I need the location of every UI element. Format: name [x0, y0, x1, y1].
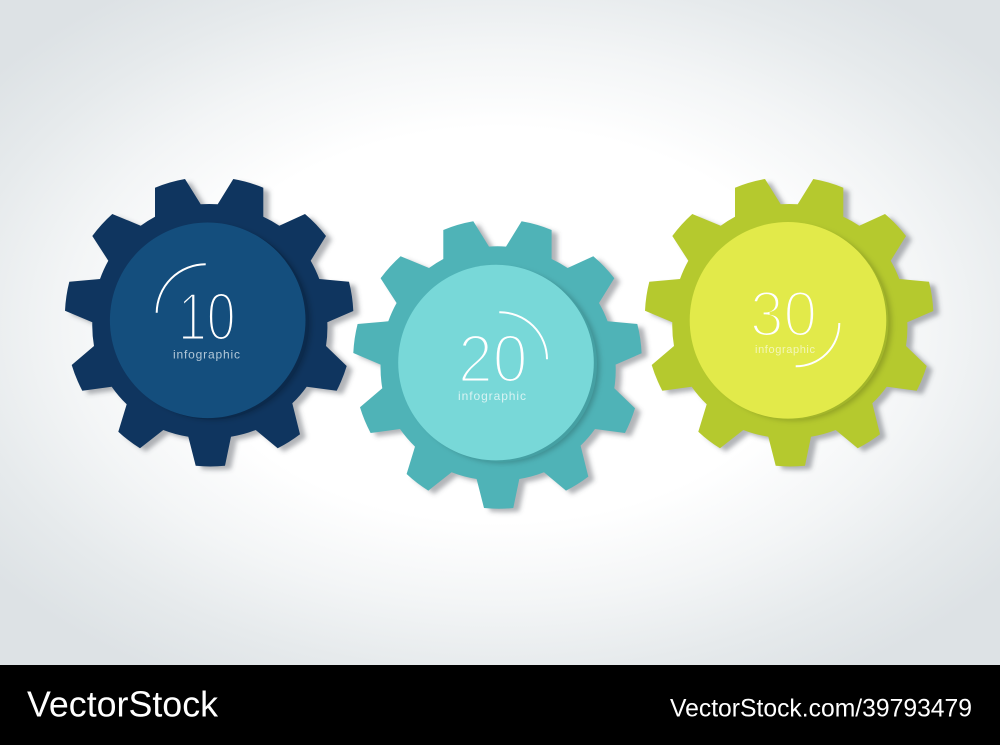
gear 2 soft disc shadow	[406, 269, 600, 463]
gear 3 drop shadow	[651, 182, 939, 470]
gear 3 disc	[690, 222, 886, 419]
gear 3 caption: infographic	[755, 344, 816, 356]
gear 2 body	[353, 221, 642, 509]
gear 2 arc	[499, 312, 547, 359]
gear 1 body	[65, 179, 353, 466]
gear 3 number: 30	[750, 279, 817, 350]
gear 1: navy, value 10	[65, 179, 359, 470]
gear 2 caption: infographic	[458, 389, 526, 403]
gear 1 drop shadow	[71, 182, 359, 470]
gear 1 disc edge	[114, 224, 309, 420]
gear 2 drop shadow	[359, 225, 648, 512]
gear 1 soft disc shadow	[117, 226, 311, 420]
gear 1 arc	[157, 264, 206, 313]
gear 2: teal, value 20	[353, 221, 648, 512]
gear 2 disc edge	[402, 267, 597, 462]
gear 1 caption: infographic	[173, 348, 240, 362]
footer bar	[0, 665, 1000, 745]
gear 3 arc	[796, 323, 839, 366]
gear 2 disc	[398, 265, 594, 460]
gear 3 body	[645, 179, 933, 466]
gear 1 number: 10	[178, 278, 235, 355]
footer brand: VectorStock	[27, 684, 219, 724]
gear 1 disc	[110, 222, 306, 418]
gear 3: lime, value 30	[645, 179, 939, 470]
gear 3 disc edge	[692, 224, 888, 420]
gear 3 soft disc shadow	[698, 226, 892, 420]
footer url: VectorStock.com/39793479	[670, 694, 972, 722]
gear 2 number: 20	[458, 321, 528, 397]
